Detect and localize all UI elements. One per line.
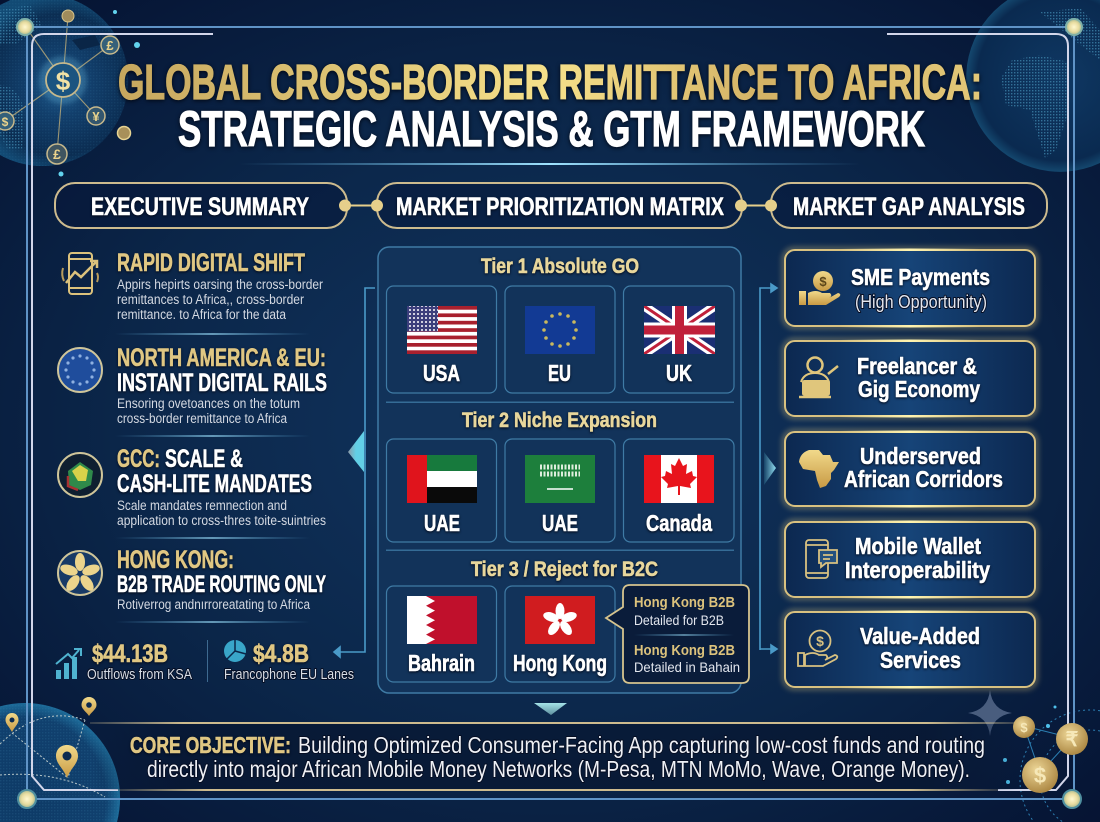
header: market gap analysis: MARKET GAP ANALYSIS bbox=[793, 193, 1025, 221]
globe: bottom left location pins bbox=[0, 697, 120, 822]
icon: rising bar chart bbox=[56, 649, 81, 679]
globe: top right dotted world bbox=[966, 0, 1100, 172]
item: rapid digital shift: remittances to Africa,, cross-border bbox=[117, 292, 304, 307]
card: mobile wallet bbox=[784, 520, 1036, 598]
item: rapid digital shift: remittance. to Africa for the data bbox=[117, 307, 286, 322]
header: market prioritization matrix: MARKET PRIORITIZATION MATRIX bbox=[396, 193, 724, 221]
header connectors bbox=[340, 200, 776, 210]
panel: market gap analysis bbox=[784, 248, 1036, 688]
callout: hong kong b2b: Detailed in Bahain bbox=[634, 659, 740, 675]
decorative sparkle star bbox=[968, 690, 1012, 736]
heading: tier 3: Tier 3 / Reject for B2C bbox=[471, 558, 658, 581]
header: executive summary bbox=[55, 183, 347, 228]
panel: executive summary bbox=[56, 249, 354, 683]
card: uae: UAE bbox=[424, 510, 460, 536]
title bbox=[118, 56, 982, 157]
card: freelancer bbox=[784, 340, 1036, 418]
icon: gold coins: ₹ bbox=[1066, 729, 1079, 751]
card: value added services: Value-Added bbox=[860, 623, 980, 649]
heading: tier 2: Tier 2 Niche Expansion bbox=[462, 409, 657, 432]
stat: outflows from ksa: Outflows from KSA bbox=[87, 666, 192, 683]
card: eu: EU bbox=[548, 360, 571, 386]
item: north america and eu: NORTH AMERICA & EU: bbox=[117, 344, 326, 372]
item: rapid digital shift: Appirs hepirts oarsing the cross-border bbox=[117, 277, 323, 292]
panel: core objective bbox=[90, 722, 1020, 791]
globe: top left currency network bbox=[0, 0, 140, 176]
stat: francophone eu lanes bbox=[224, 640, 354, 683]
callout: hong kong b2b: Hong Kong B2B bbox=[634, 642, 735, 659]
card: freelancer: Gig Economy bbox=[858, 376, 980, 402]
network: bottom right bbox=[1003, 706, 1100, 822]
card: hong kong: Hong Kong bbox=[513, 650, 607, 676]
section headers bbox=[55, 183, 1047, 228]
card: canada: Canada bbox=[646, 510, 712, 536]
icon: gcc emblem bbox=[58, 453, 102, 497]
card: value added services bbox=[784, 610, 1036, 688]
item: hong kong: Rotiverrog andnırroreatating to Africa bbox=[117, 597, 310, 612]
item: north america and eu: INSTANT DIGITAL RAILS bbox=[117, 369, 327, 397]
item: gcc: GCC: bbox=[117, 445, 160, 473]
icon: gold coins bbox=[1013, 716, 1088, 793]
card: bahrain bbox=[386, 586, 496, 682]
icon: hand holding coin: $ bbox=[819, 274, 827, 289]
stat: outflows from ksa bbox=[56, 640, 192, 683]
globe: top left currency network: £ bbox=[53, 146, 61, 162]
card: mobile wallet: Interoperability bbox=[845, 557, 990, 583]
item: gcc: CASH-LITE MANDATES bbox=[117, 470, 312, 498]
item: gcc bbox=[58, 445, 326, 539]
arrow: right triangle bbox=[764, 452, 776, 485]
card: sme payments bbox=[784, 248, 1036, 328]
arrow: down triangle bbox=[534, 703, 567, 715]
card: usa bbox=[386, 286, 496, 393]
callout: hong kong b2b bbox=[606, 585, 749, 683]
icon: phone with rising arrow bbox=[62, 253, 98, 294]
icon: outlined hand and coin bbox=[798, 630, 837, 666]
icon: bauhinia badge bbox=[58, 551, 102, 595]
item: hong kong: B2B TRADE ROUTING ONLY bbox=[117, 571, 326, 598]
card: uk bbox=[624, 286, 734, 393]
card: hong kong bbox=[505, 586, 615, 682]
item: hong kong bbox=[58, 546, 326, 623]
panel: market prioritization matrix bbox=[378, 247, 749, 693]
card: mobile wallet: Mobile Wallet bbox=[855, 533, 981, 559]
card: canada bbox=[624, 439, 734, 542]
card: underserved corridors bbox=[784, 430, 1036, 508]
card: bahrain: Bahrain bbox=[408, 650, 475, 676]
stat: francophone eu lanes: Francophone EU Lanes bbox=[224, 666, 354, 683]
card: sme payments: (High Opportunity) bbox=[855, 292, 987, 312]
card: usa: USA bbox=[423, 360, 460, 386]
item: rapid digital shift bbox=[62, 249, 323, 335]
icon: freelancer at laptop bbox=[799, 358, 838, 397]
item: gcc: SCALE & bbox=[165, 445, 243, 473]
icon: eu badge bbox=[58, 348, 102, 392]
icon: pin small right bbox=[82, 697, 96, 716]
item: hong kong: HONG KONG: bbox=[117, 546, 234, 574]
arrow: left triangle bbox=[348, 431, 364, 472]
card: uk: UK bbox=[666, 360, 692, 386]
card: saudi flag labelled uae bbox=[505, 439, 615, 542]
card: sme payments: SME Payments bbox=[851, 264, 990, 290]
icon: gold coins: $ bbox=[1020, 720, 1028, 735]
globe: top left currency network: £ bbox=[106, 38, 114, 53]
card: value added services: Services bbox=[880, 647, 961, 673]
panel: core objective: Building Optimized Consumer-Facing App capturing low-cost funds and routing bbox=[298, 732, 985, 758]
arrow: right bracket bbox=[760, 284, 777, 653]
item: north america and eu: Ensoring ovetoances on the totum bbox=[117, 396, 300, 411]
heading: tier 1: Tier 1 Absolute GO bbox=[481, 255, 639, 278]
header: market prioritization matrix bbox=[377, 183, 742, 228]
card: eu bbox=[505, 286, 615, 393]
icon: phone with chat bubble bbox=[806, 540, 837, 578]
icon: outlined hand and coin: $ bbox=[816, 633, 824, 649]
stat: francophone eu lanes: $4.8B bbox=[253, 640, 309, 668]
item: gcc: Scale mandates remnection and bbox=[117, 498, 287, 513]
icon: pie chart bbox=[224, 640, 246, 662]
card: underserved corridors: African Corridors bbox=[844, 466, 1003, 492]
header: market gap analysis bbox=[771, 183, 1047, 228]
item: gcc: application to cross-thres toite-suintries bbox=[117, 513, 326, 528]
icon: gold coins: $ bbox=[1034, 763, 1046, 788]
item: north america and eu bbox=[58, 344, 327, 437]
header: executive summary: EXECUTIVE SUMMARY bbox=[91, 193, 309, 221]
card: uae bbox=[386, 439, 496, 542]
globe: top left currency network: $ bbox=[56, 66, 71, 96]
stat: outflows from ksa: $44.13B bbox=[92, 640, 168, 668]
icon: hand holding coin bbox=[799, 271, 840, 305]
callout: hong kong b2b: Hong Kong B2B bbox=[634, 594, 735, 611]
card: freelancer: Freelancer & bbox=[857, 353, 977, 379]
panel: core objective: CORE OBJECTIVE: bbox=[130, 732, 291, 758]
callout: hong kong b2b: Detailed for B2B bbox=[634, 612, 724, 628]
item: rapid digital shift: RAPID DIGITAL SHIFT bbox=[117, 249, 305, 277]
icon: africa map bbox=[799, 450, 839, 488]
icon: pin small left bbox=[6, 713, 18, 732]
arrow: left bracket bbox=[334, 288, 375, 657]
globe: top left currency network: $ bbox=[2, 115, 9, 129]
item: north america and eu: cross-border remittance to Africa bbox=[117, 411, 287, 426]
card: saudi flag labelled uae: UAE bbox=[542, 510, 578, 536]
globe: top left currency network: ¥ bbox=[92, 109, 100, 124]
icon: pin large bbox=[56, 745, 78, 778]
card: underserved corridors: Underserved bbox=[860, 443, 981, 469]
